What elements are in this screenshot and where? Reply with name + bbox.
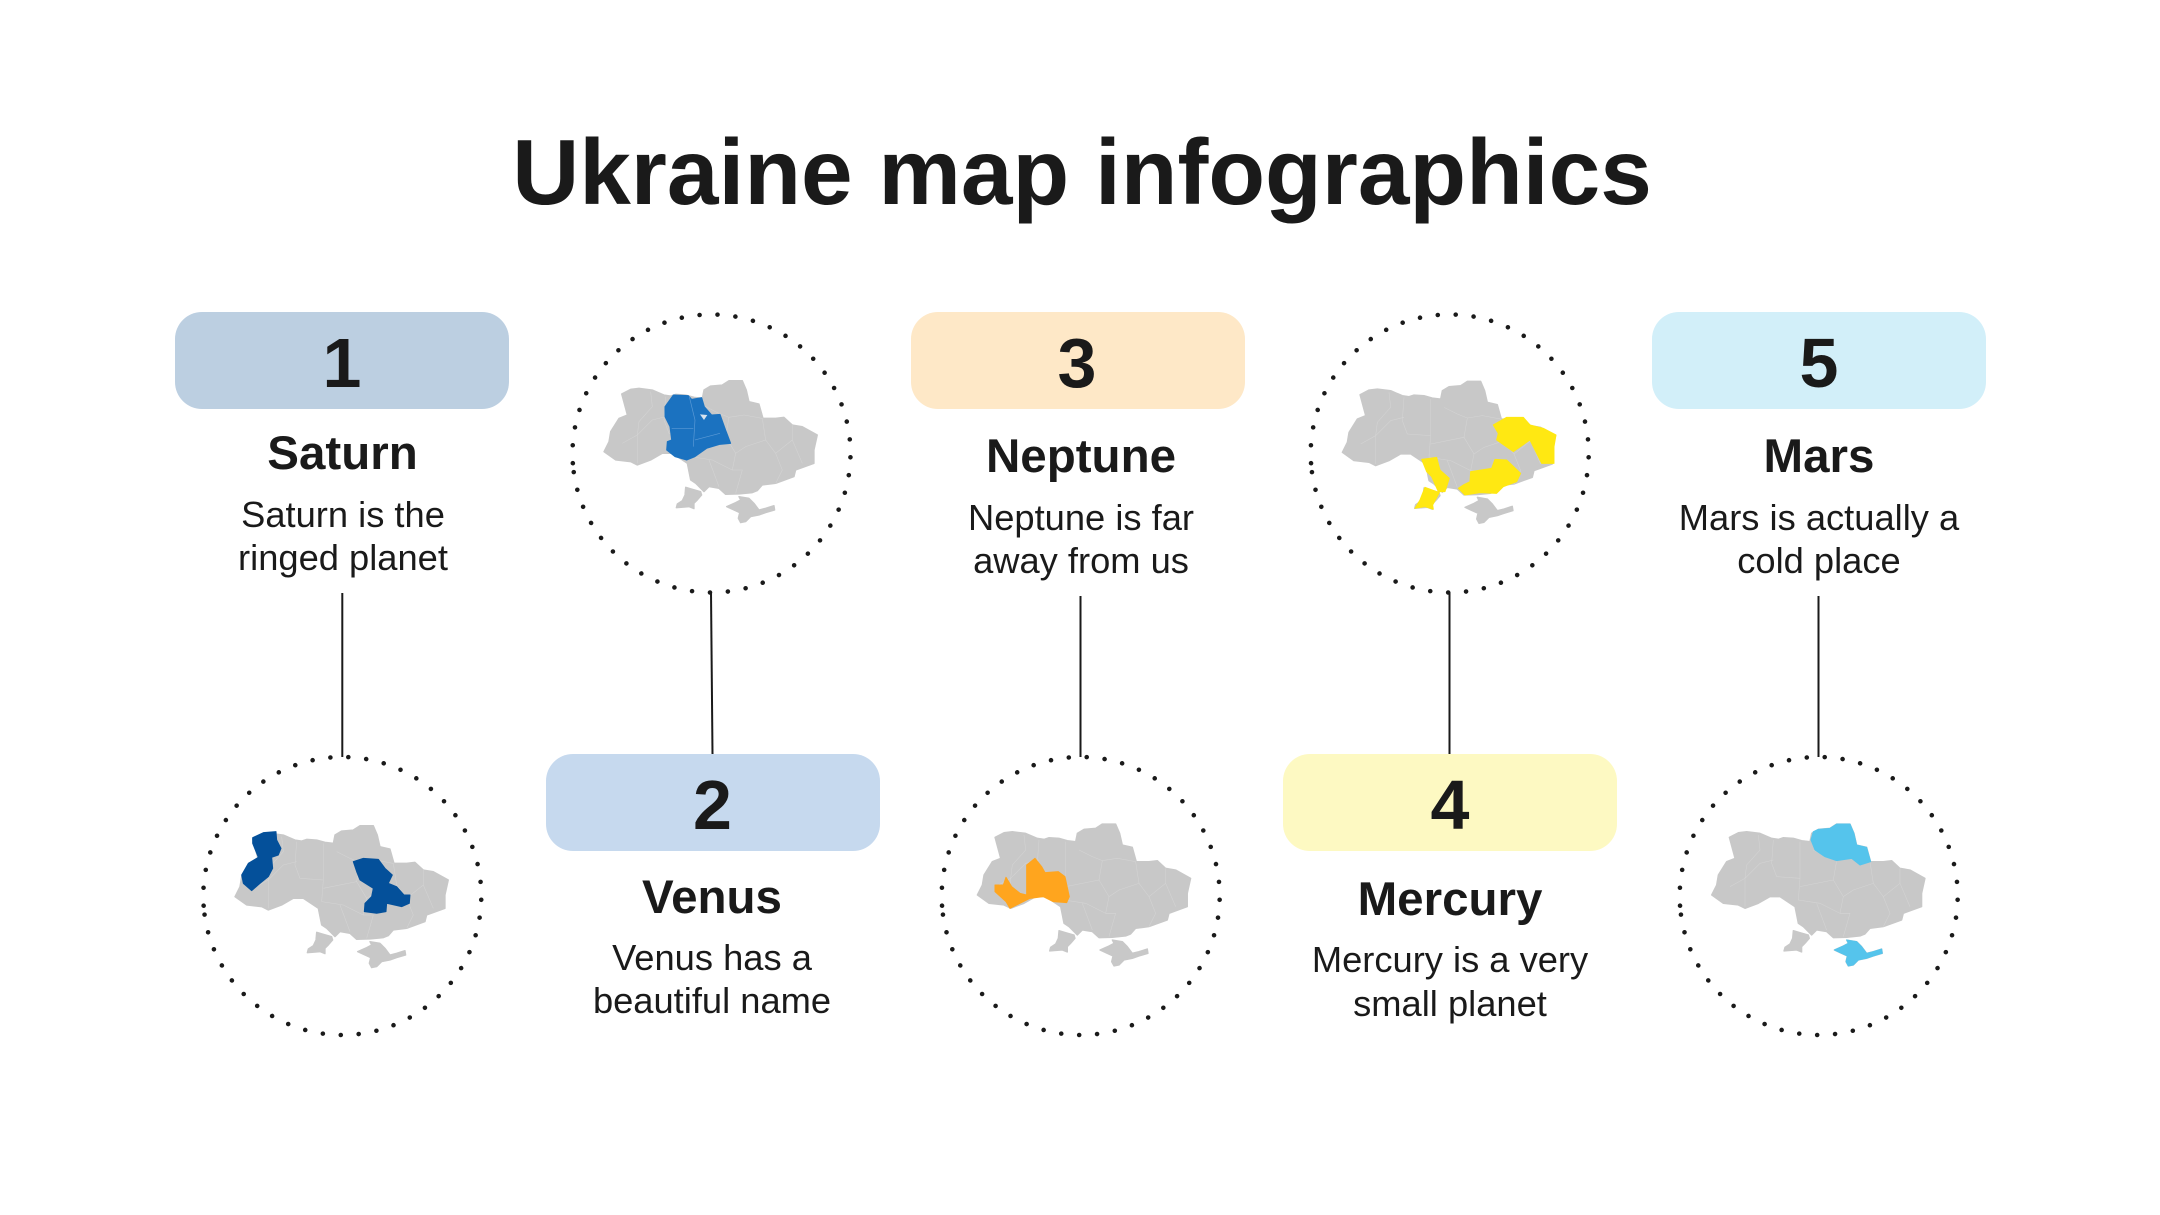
number badge 2 <box>546 754 880 851</box>
number badge 5 <box>1652 312 1986 409</box>
panel: Mercury <box>1283 754 1617 1024</box>
map circle: Neptune <box>932 748 1229 1044</box>
icon: Ukraine map, Mercury regions <box>1342 381 1556 523</box>
text: Saturn description: Saturn is the <box>241 494 445 535</box>
number badge 3: 3 <box>1058 324 1096 402</box>
heading: Neptune: Neptune <box>986 430 1176 483</box>
number badge 5: 5 <box>1800 324 1838 402</box>
text: Mercury description: Mercury is a very <box>1312 939 1589 980</box>
map circle: Mercury <box>1301 305 1598 602</box>
panel: Neptune <box>911 312 1245 581</box>
heading: Mercury: Mercury <box>1358 873 1543 926</box>
icon: Ukraine map, Mars regions <box>1712 824 1925 966</box>
icon: Ukraine map, Neptune regions <box>977 824 1191 966</box>
heading: Mars: Mars <box>1764 430 1874 483</box>
text: Mars description: cold place <box>1737 540 1901 581</box>
number badge 2: 2 <box>693 766 732 844</box>
text: Saturn description: ringed planet <box>238 537 448 578</box>
heading: Saturn: Saturn <box>267 427 418 480</box>
number badge 4: 4 <box>1431 766 1470 844</box>
connector: item 2 <box>711 592 712 754</box>
title: Ukraine map infographics <box>512 120 1652 224</box>
connector: item 3 <box>1080 596 1082 757</box>
text: Neptune description: Neptune is far <box>968 497 1194 538</box>
map circle: Venus <box>563 305 860 602</box>
text: Neptune description: away from us <box>973 540 1189 581</box>
icon: Ukraine map, Saturn regions <box>235 826 448 968</box>
number badge 4 <box>1283 754 1617 851</box>
connector: item 4 <box>1448 592 1450 754</box>
map circle: Mars <box>1670 748 1967 1044</box>
number badge 3 <box>911 312 1245 409</box>
text: Mercury description: small planet <box>1353 983 1547 1024</box>
heading: Venus: Venus <box>642 871 782 924</box>
number badge 1: 1 <box>323 324 361 402</box>
connector: item 1 <box>341 593 343 757</box>
text: Venus description: beautiful name <box>593 980 831 1021</box>
connector: item 5 <box>1818 596 1820 757</box>
icon: Ukraine map, Venus regions <box>604 381 817 523</box>
text: Mars description: Mars is actually a <box>1679 497 1960 538</box>
map circle: Saturn <box>194 748 491 1044</box>
text: Venus description: Venus has a <box>612 937 813 978</box>
panel: Saturn <box>175 312 509 578</box>
panel: Venus <box>546 754 880 1021</box>
panel: Mars <box>1652 312 1986 581</box>
number badge 1 <box>175 312 509 409</box>
